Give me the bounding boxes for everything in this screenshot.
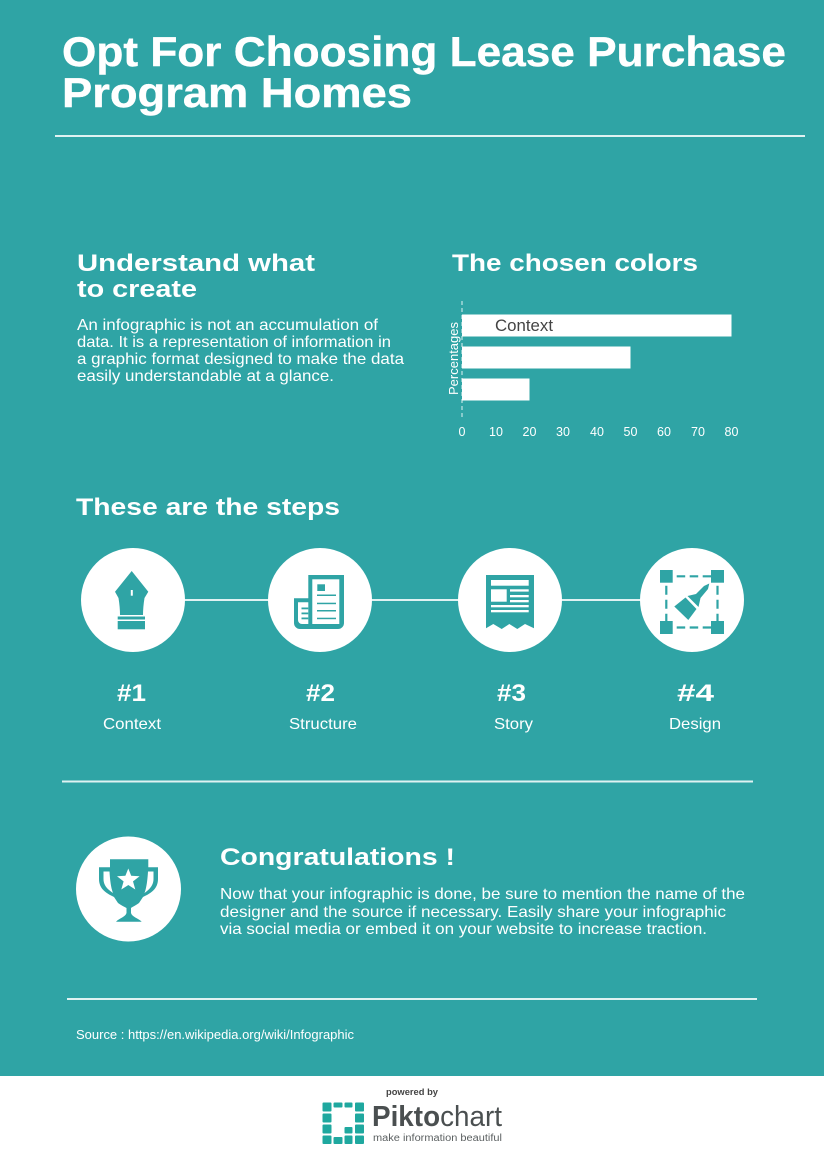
heading: congratulations: Congratulations ! [220,844,455,871]
bar chart: 60 [657,425,671,439]
icon: pen nib [115,571,148,629]
title: Program Homes [62,69,412,116]
bar chart [446,301,738,439]
heading: understand: Understand what [77,250,315,277]
bar chart: 40 [590,425,604,439]
powered by: powered by [386,1087,439,1098]
step 4 design [640,548,744,733]
icon: newspaper [294,575,344,629]
text block: congratulations [220,886,745,938]
bar chart: 20 [523,425,536,439]
heading: chosen colors: The chosen colors [452,250,698,277]
bar chart: Percentages [446,322,461,395]
text block: congratulations: designer and the source if necessary. Easily share your infographic [220,904,726,921]
step 3 story: Story [494,716,533,733]
bar chart: Context [495,317,553,335]
wordmark: Piktochart [372,1101,502,1133]
title [62,28,786,116]
text block: congratulations: via social media or embed it on your website to increase traction. [220,921,707,938]
step 3 story [458,548,562,733]
footer: piktochart branding [0,1076,824,1156]
bar chart: 80 [725,425,738,439]
step 2 structure: Structure [289,716,357,733]
step 1 context: #1 [117,680,146,707]
text block: definition: a graphic format designed to make the data [77,351,404,368]
icon: receipt article [486,575,534,629]
text block: congratulations: Now that your infographic is done, be sure to mention the name of the [220,886,745,903]
step 2 structure: #2 [306,680,335,707]
icon: piktochart logo [322,1102,364,1144]
step 3 story: #3 [497,680,526,707]
text block: definition: An infographic is not an accumulation of [77,317,379,334]
step 4 design: #4 [677,680,715,707]
step 2 structure [268,548,372,733]
bar chart: 70 [691,425,705,439]
heading: steps: These are the steps [76,494,340,521]
panel: the chosen colors [446,250,738,439]
text block: definition [77,317,404,385]
text block: definition: easily understandable at a glance. [77,368,334,385]
bar chart: 50 [624,425,637,439]
bar chart: 10 [489,425,503,439]
bar chart: 0 [459,425,466,439]
source: Source : https://en.wikipedia.org/wiki/Infographic [76,1027,354,1042]
heading: understand [77,250,315,303]
text block: definition: data. It is a representation of information in [77,334,391,351]
heading: understand: to create [77,276,197,303]
panel: understand what to create [77,250,404,385]
tagline: make information beautiful [373,1133,502,1144]
step 1 context: Context [103,716,162,733]
title: Opt For Choosing Lease Purchase [62,28,786,75]
step 4 design: Design [669,716,721,733]
icon: paintbrush in selection frame [660,570,724,634]
bar chart: 30 [556,425,570,439]
panel: steps timeline [81,548,744,733]
panel: congratulations [76,836,745,942]
icon: trophy [99,859,158,922]
step 1 context [81,548,185,733]
